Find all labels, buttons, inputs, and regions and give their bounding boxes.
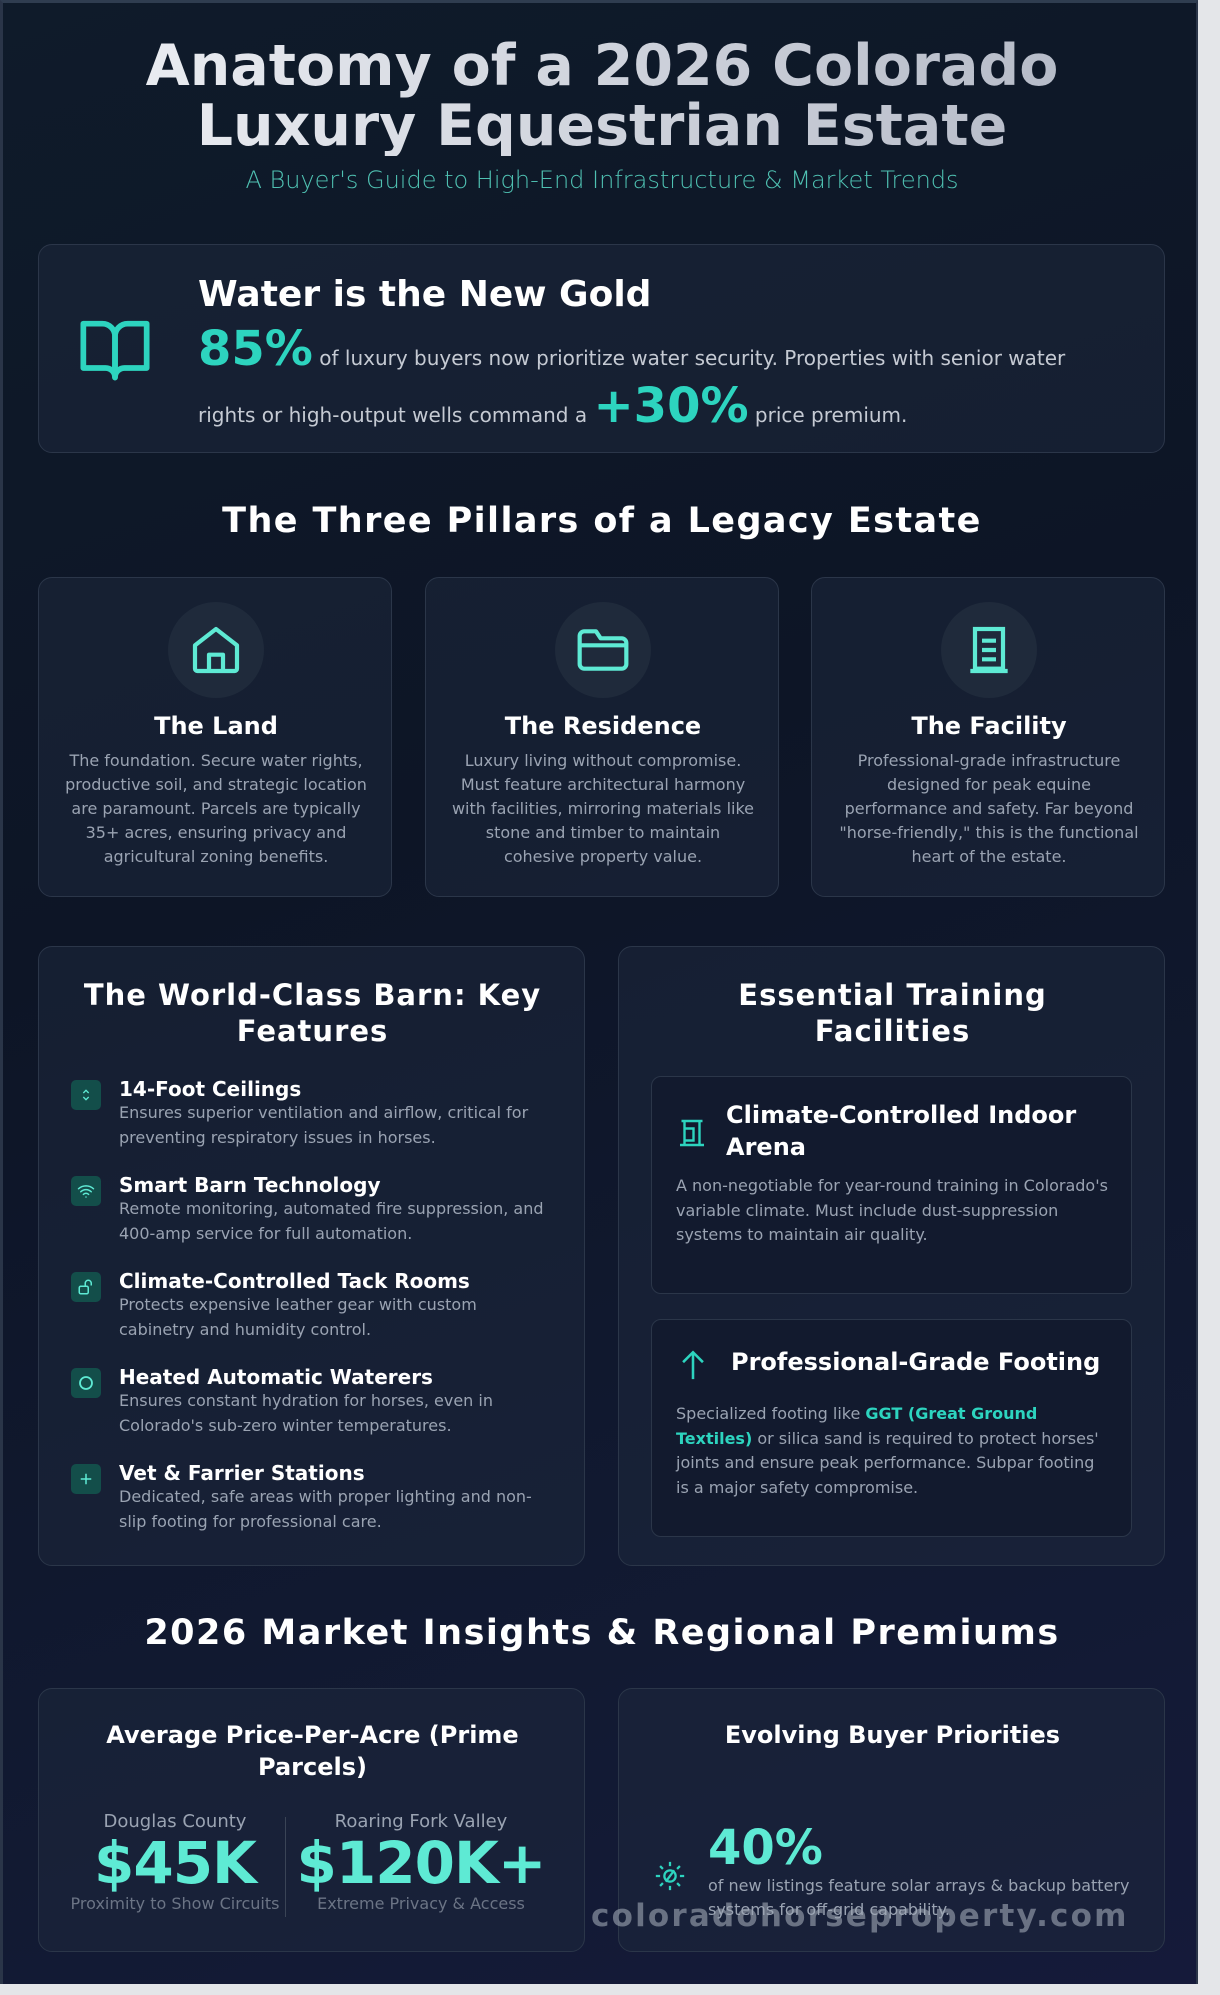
stat: 40% (708, 1820, 1129, 1919)
item: waterers (71, 1365, 493, 1434)
text: Professional-grade infrastructure designed for peak equine performance and safety. Far beyond "horse-friendly," this is the functional heart of the estate. (839, 751, 1139, 866)
item: ceilings: 14-Foot Ceilings (119, 1077, 301, 1101)
watermark: coloradohorseproperty.com (591, 1898, 1129, 1934)
icon: folder (555, 602, 651, 698)
panel: the facility (811, 577, 1165, 897)
heading: pillars: The Three Pillars of a Legacy Estate (222, 501, 982, 541)
stat: roaring fork: Roaring Fork Valley (335, 1811, 507, 1832)
heading: Essential Training (738, 978, 1047, 1012)
stat: douglas (71, 1811, 279, 1913)
item: vet stations (71, 1461, 532, 1530)
text: The Facility (911, 712, 1067, 740)
heading: Facilities (815, 1014, 970, 1048)
text: The Land (154, 712, 278, 740)
stat: douglas: $45K (94, 1829, 256, 1897)
item: tack rooms: Protects expensive leather gear with custom cabinetry and humidity control. (119, 1295, 477, 1338)
card: footing (651, 1319, 1132, 1537)
heading: Water is the New Gold (198, 274, 651, 315)
icon: building (941, 602, 1037, 698)
stat: roaring fork (297, 1811, 545, 1913)
panel: buyer priorities (618, 1688, 1165, 1952)
title (3, 36, 1201, 156)
stat: 40%: of new listings feature solar arrays & backup battery systems for off-grid capability. (708, 1876, 1129, 1919)
title: Anatomy of a 2026 Colorado (146, 33, 1058, 99)
text: The foundation. Secure water rights, productive soil, and strategic location are paramount. Parcels are typically 35+ acres, ensuring privacy and agricultural zoning benefits. (65, 751, 367, 866)
text: Luxury living without compromise. Must feature architectural harmony with facilities, mirroring materials like stone and timber to maintain cohesive property value. (452, 751, 754, 866)
item: tack rooms: Climate-Controlled Tack Rooms (119, 1269, 470, 1293)
panel: the land (38, 577, 392, 897)
card: indoor arena: Climate-Controlled Indoor (726, 1101, 1076, 1129)
stat text: 85% of luxury buyers now prioritize water security. Properties with senior water rights or high-output wells command a +30% price premium. (198, 321, 1065, 434)
item: smart barn: Smart Barn Technology (119, 1173, 381, 1197)
panel: the residence (425, 577, 779, 897)
item: waterers: Heated Automatic Waterers (119, 1365, 433, 1389)
card: footing: Specialized footing like GGT (Great Ground Textiles) or silica sand is required to protect horses' joints and ensure peak performance. Subpar footing is a major safety compromise. (676, 1404, 1099, 1496)
divider (285, 1817, 286, 1917)
item: waterers: Ensures constant hydration for horses, even in Colorado's sub-zero winter temperatures. (119, 1391, 493, 1434)
icon: book (80, 320, 150, 380)
icon: arrow up (682, 1350, 704, 1380)
panel: price per acre: Average Price-Per-Acre (Prime (106, 1721, 519, 1749)
text: The Residence (505, 712, 701, 740)
stat: 40%: 40% (708, 1820, 823, 1876)
heading: market: 2026 Market Insights & Regional Premiums (144, 1613, 1060, 1653)
title: Luxury Equestrian Estate (197, 93, 1007, 159)
stat: roaring fork: $120K+ (297, 1829, 545, 1897)
subtitle: A Buyer's Guide to High-End Infrastructure & Market Trends (245, 166, 959, 194)
item: smart barn (71, 1173, 544, 1242)
panel: price per acre: Parcels) (258, 1753, 367, 1781)
panel: training facilities (618, 946, 1165, 1566)
heading: The World-Class Barn: Key (84, 978, 541, 1012)
item: ceilings: Ensures superior ventilation and airflow, critical for preventing respiratory issues in horses. (119, 1103, 528, 1146)
heading (738, 978, 1047, 1048)
panel: water (38, 244, 1165, 453)
item: vet stations: Vet & Farrier Stations (119, 1461, 365, 1485)
item: ceilings (71, 1077, 528, 1146)
stat: douglas: Douglas County (104, 1811, 246, 1832)
heading: Features (237, 1014, 388, 1048)
heading (84, 978, 541, 1048)
card: indoor arena: Arena (726, 1133, 806, 1161)
card: footing: Professional-Grade Footing (731, 1348, 1100, 1376)
stat: roaring fork: Extreme Privacy & Access (317, 1894, 525, 1913)
card: indoor arena (651, 1076, 1132, 1294)
panel: price per acre (38, 1688, 585, 1952)
card: indoor arena: A non-negotiable for year-round training in Colorado's variable climate. Must include dust-suppression systems to maintain air quality. (676, 1176, 1108, 1244)
item: vet stations: Dedicated, safe areas with proper lighting and non-slip footing for professional care. (119, 1487, 532, 1530)
panel: barn features (38, 946, 585, 1566)
icon: house (168, 602, 264, 698)
icon: sun (656, 1862, 684, 1890)
icon: arena (680, 1120, 704, 1146)
item: tack rooms (71, 1269, 477, 1338)
panel: buyer priorities: Evolving Buyer Priorities (725, 1721, 1060, 1749)
stat: douglas: Proximity to Show Circuits (71, 1894, 279, 1913)
item: smart barn: Remote monitoring, automated fire suppression, and 400-amp service for full automation. (119, 1199, 544, 1242)
